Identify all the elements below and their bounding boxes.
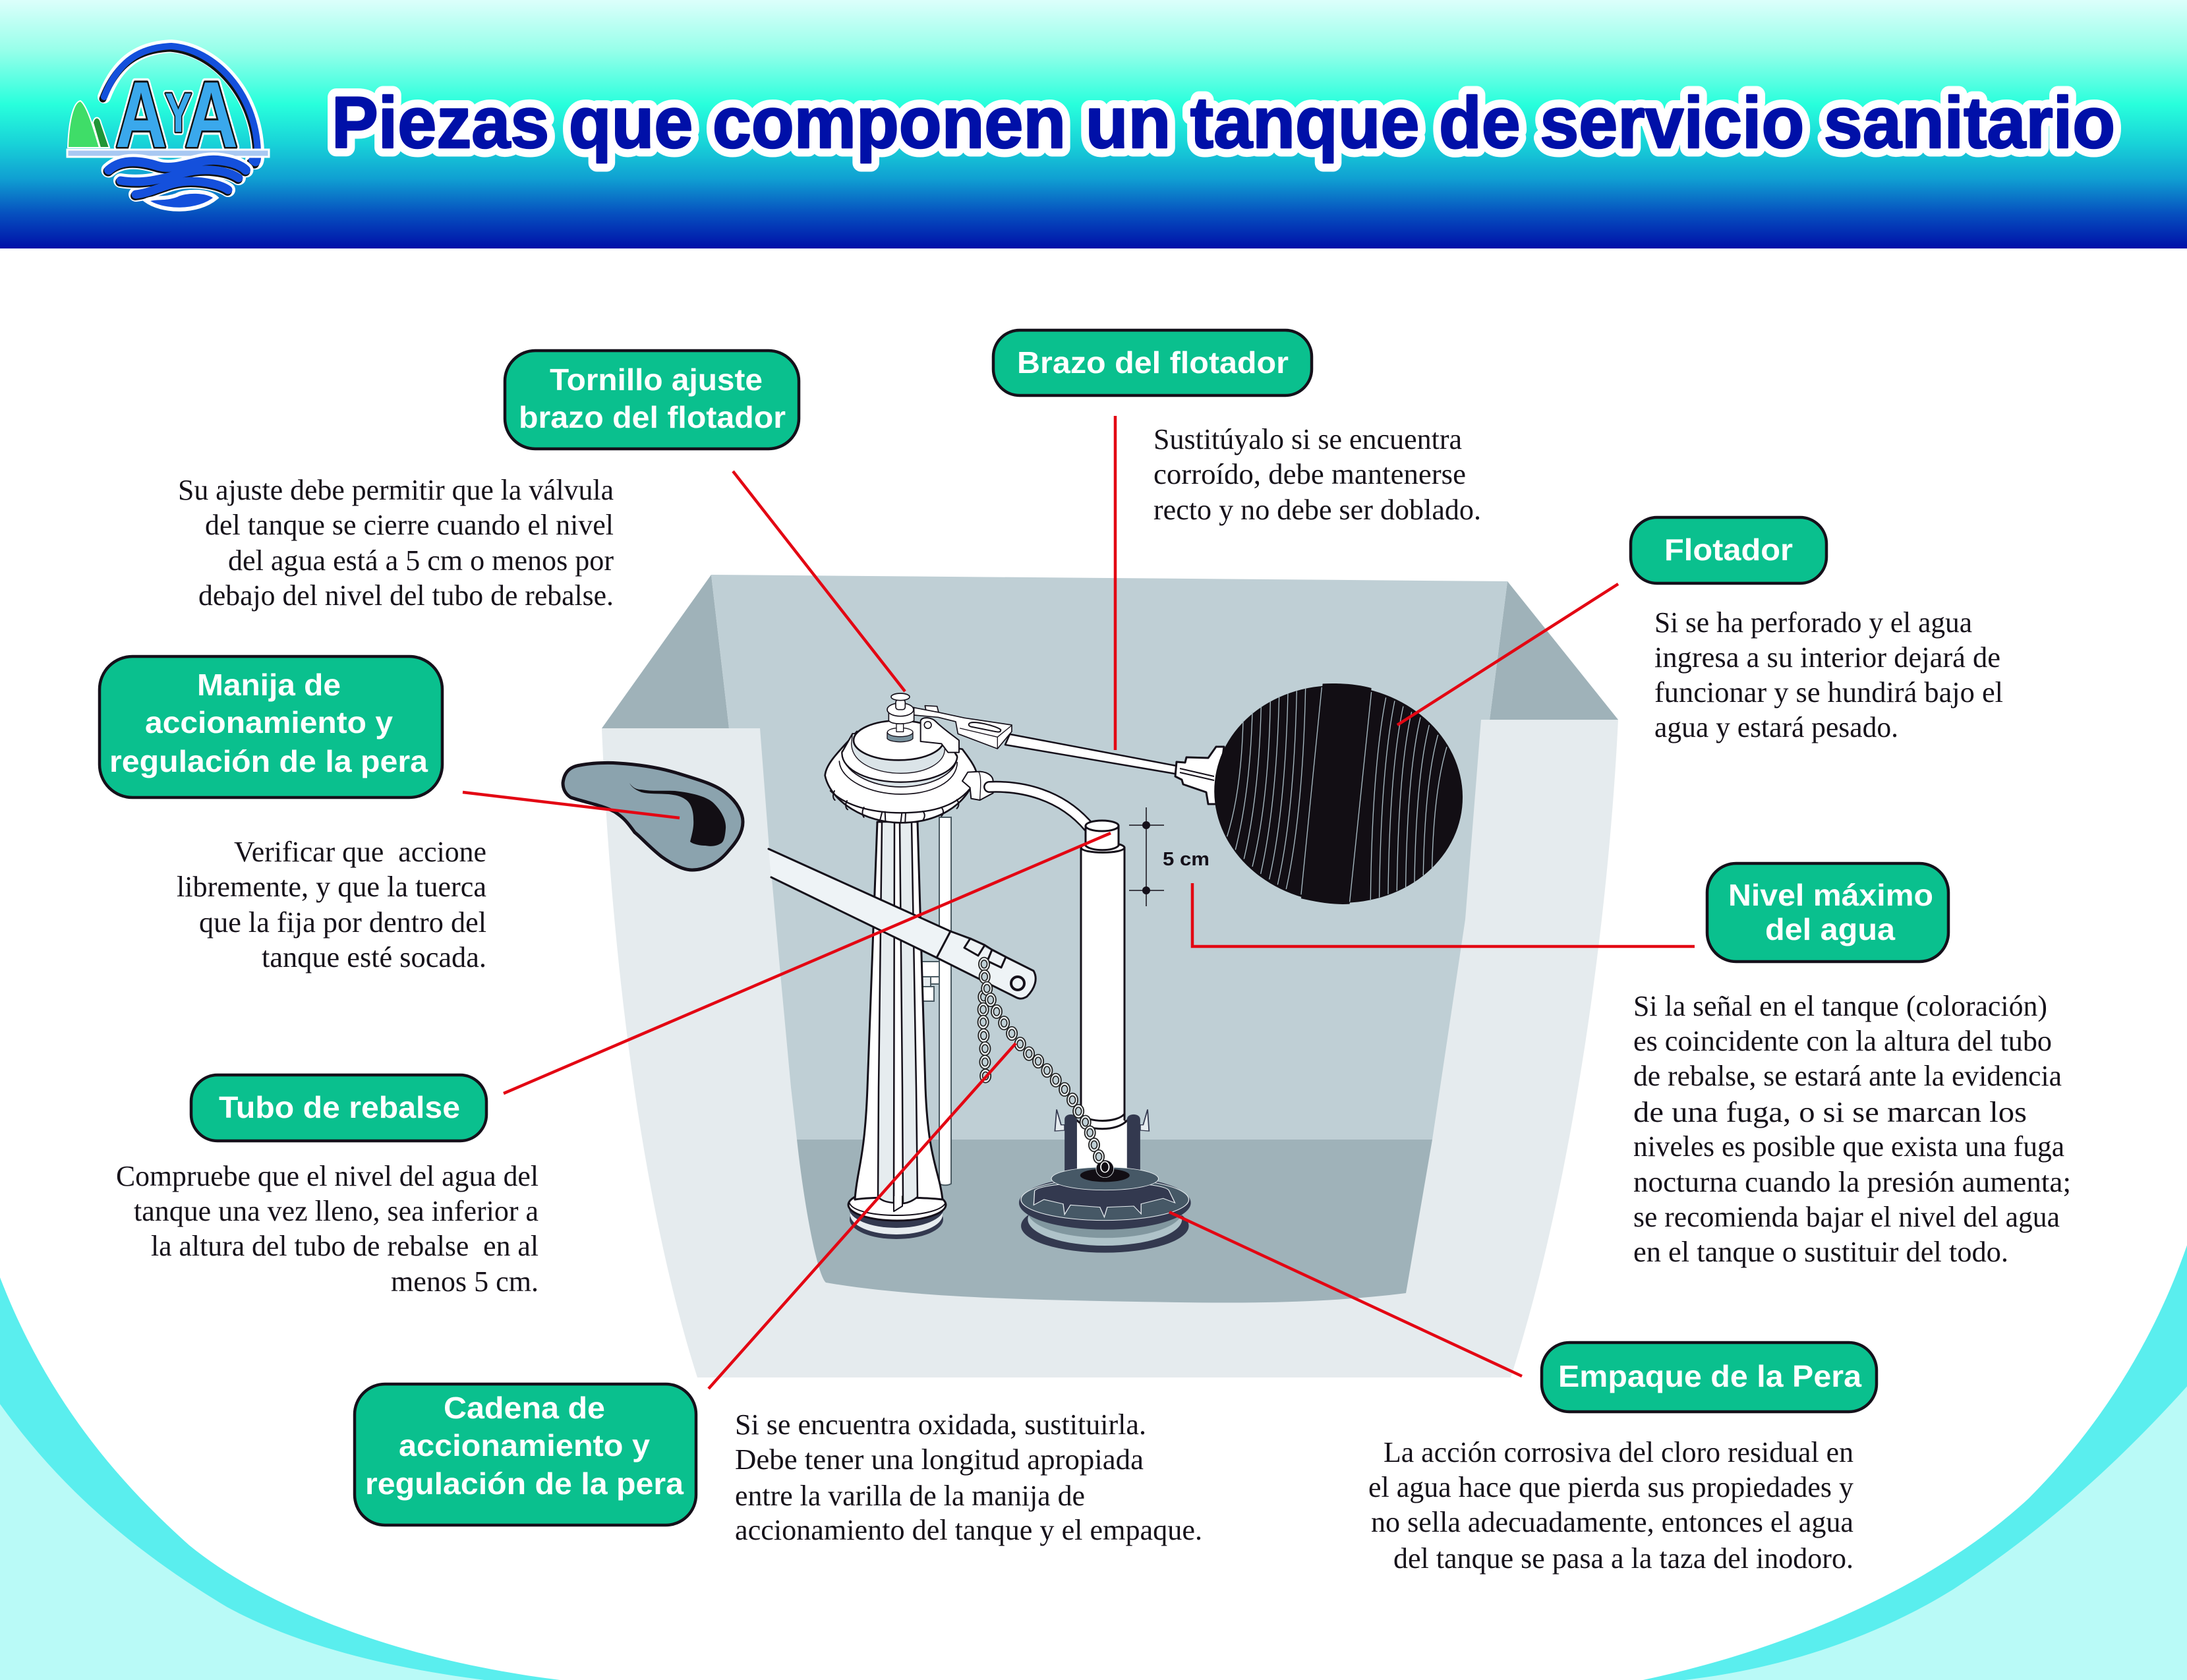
text: nivel: nocturna cuando la presión aumenta; — [1633, 1166, 2071, 1198]
arm — [913, 707, 1012, 749]
panel: brazo del flotador — [993, 330, 1481, 526]
panel: empaque de la pera — [1368, 1343, 1877, 1575]
flapper assembly — [1019, 1109, 1191, 1253]
text: empaque: no sella adecuadamente, entonces el agua — [1371, 1506, 1853, 1538]
text: brazo: corroído, debe mantenerse — [1153, 458, 1466, 490]
pill: flotador: Flotador — [1664, 533, 1793, 567]
pill: manija — [100, 656, 442, 797]
pill: tubo: Tubo de rebalse — [219, 1090, 460, 1124]
refill hose — [989, 787, 1089, 827]
text: cadena: Si se encuentra oxidada, sustituirla. — [735, 1408, 1146, 1441]
panel: nivel maximo del agua — [1633, 863, 2071, 1268]
leader: cadena — [709, 1043, 1016, 1389]
fill valve foot — [848, 1188, 946, 1239]
valve dome — [854, 720, 944, 760]
fill valve head — [825, 693, 1012, 823]
panel: tubo de rebalse — [116, 1075, 539, 1298]
text: nivel: niveles es posible que exista una fuga — [1633, 1130, 2064, 1163]
float connector — [1175, 747, 1224, 804]
tank floor — [797, 1140, 1432, 1303]
text: nivel: en el tanque o sustituir del todo. — [1633, 1236, 2008, 1268]
text: cadena — [735, 1408, 1202, 1546]
pill: empaque: Empaque de la Pera — [1558, 1359, 1861, 1393]
text: nivel: de rebalse, se estará ante la evidencia — [1633, 1060, 2062, 1092]
text: manija: tanque esté socada. — [262, 941, 486, 973]
text: tornillo: del agua está a 5 cm o menos por — [228, 544, 614, 577]
text: tubo: Compruebe que el nivel del agua del — [116, 1160, 539, 1192]
pill: tornillo — [505, 351, 799, 449]
logo letters: A — [115, 63, 167, 167]
logo letters: A — [185, 63, 238, 167]
panel: cadena — [355, 1384, 1202, 1546]
leader lines — [463, 416, 1695, 1389]
text: tubo — [116, 1160, 539, 1298]
text: flotador — [1654, 606, 2003, 743]
panel: tornillo ajuste — [178, 351, 799, 612]
leader: empaque — [1169, 1212, 1522, 1376]
text: manija: libremente, y que la tuerca — [177, 871, 486, 903]
pill: nivel: Nivel máximo — [1728, 878, 1933, 912]
text: nivel: Si la señal en el tanque (coloración) — [1633, 990, 2047, 1022]
text: tubo: menos 5 cm. — [391, 1265, 539, 1298]
text: empaque: del tanque se pasa a la taza del inodoro. — [1393, 1542, 1853, 1575]
float ball — [1204, 674, 1473, 915]
logo letters: Y — [165, 82, 192, 144]
text: tubo: tanque una vez lleno, sea inferior a — [134, 1195, 539, 1227]
text: nivel: de una fuga, o si se marcan los — [1633, 1096, 2027, 1128]
logo mountains — [68, 101, 109, 148]
text: empaque: La acción corrosiva del cloro residual en — [1384, 1436, 1853, 1468]
logo letters: A — [115, 63, 167, 167]
leader: tubo — [504, 833, 1111, 1093]
text: cadena: Debe tener una longitud apropiada — [735, 1443, 1144, 1476]
decorative wave: bottom left corner — [0, 1277, 560, 1680]
text: manija: Verificar que accione — [234, 836, 486, 868]
title: Piezas que componen un tanque de servicio sanitario — [332, 82, 2115, 163]
chain — [978, 958, 1104, 1163]
text: manija: que la fija por dentro del — [199, 906, 486, 939]
text: empaque: el agua hace que pierda sus propiedades y — [1368, 1471, 1853, 1503]
logo horizon bar — [67, 150, 269, 157]
logo letters: A — [185, 63, 238, 167]
text: tornillo — [178, 474, 614, 612]
pill: flotador — [1631, 517, 1826, 583]
pill: cadena: accionamiento y — [399, 1428, 650, 1463]
text: cadena: accionamiento del tanque y el empaque. — [735, 1514, 1202, 1546]
logo letters: Y — [165, 82, 192, 144]
pill: cadena: regulación de la pera — [365, 1466, 684, 1501]
logo letters — [115, 63, 238, 167]
flapper hole — [1080, 1169, 1130, 1182]
flapper dome with teeth — [1034, 1182, 1175, 1217]
flapper clips — [1055, 1109, 1149, 1131]
float rod — [1005, 734, 1177, 774]
valve base disc — [825, 732, 977, 823]
pill: tornillo: brazo del flotador — [519, 400, 786, 434]
flapper chain ball — [1096, 1160, 1114, 1178]
tank front faces — [602, 720, 1618, 1377]
flapper posts — [1064, 1115, 1140, 1175]
panel: flotador — [1631, 517, 2003, 743]
logo arc — [103, 46, 258, 165]
logo waves — [108, 160, 246, 196]
pill: nivel: del agua — [1765, 912, 1895, 946]
text: tubo: la altura del tubo de rebalse en al — [151, 1230, 539, 1262]
pill: brazo — [993, 330, 1312, 395]
title: Piezas que componen un tanque de servicio sanitario — [332, 82, 2115, 163]
text: brazo: Sustitúyalo si se encuentra — [1153, 423, 1462, 455]
screw collar — [889, 707, 914, 724]
pill: cadena — [355, 1384, 696, 1525]
valve rings — [839, 761, 957, 794]
back tab — [925, 706, 939, 712]
text: flotador: funcionar y se hundirá bajo el — [1654, 676, 2003, 709]
text: flotador: agua y estará pesado. — [1654, 711, 1898, 743]
pill: manija: regulación de la pera — [109, 744, 428, 778]
panel: manija — [100, 656, 486, 973]
pill: cadena: Cadena de — [444, 1391, 605, 1425]
fill valve column — [855, 822, 943, 1211]
flapper top disc — [1021, 1178, 1189, 1221]
pill: empaque — [1542, 1343, 1877, 1412]
text: nivel — [1633, 990, 2071, 1268]
5 cm dimension mark: 5 cm — [1163, 849, 1210, 870]
text: tornillo: debajo del nivel del tubo de rebalse. — [198, 579, 614, 612]
pill: tubo — [191, 1075, 486, 1141]
thin refill tube — [939, 817, 951, 1185]
tank illustration — [563, 575, 1618, 1377]
handle — [563, 763, 743, 870]
pill: manija: accionamiento y — [145, 705, 393, 739]
logo fish — [146, 192, 216, 210]
text: empaque — [1368, 1436, 1853, 1575]
text: tornillo: del tanque se cierre cuando el nivel — [205, 509, 614, 541]
adjusting nub — [887, 732, 913, 742]
text: nivel: es coincidente con la altura del tubo — [1633, 1025, 2052, 1057]
tank side wall right — [1490, 581, 1618, 720]
text: tornillo: Su ajuste debe permitir que la válvula — [178, 474, 614, 506]
pill: manija: Manija de — [197, 668, 341, 702]
leader: brazo — [1114, 416, 1117, 750]
text: flotador: ingresa a su interior dejará de — [1654, 641, 2000, 674]
leader: tornillo — [733, 471, 905, 691]
text: brazo — [1153, 423, 1481, 526]
leader: manija — [463, 792, 680, 818]
text: brazo: recto y no debe ser doblado. — [1153, 494, 1481, 526]
text: flotador: Si se ha perforado y el agua — [1654, 606, 1972, 639]
tank back wall — [711, 575, 1507, 1140]
latch — [921, 718, 959, 753]
pill: nivel — [1707, 863, 1948, 962]
logo: AyA — [67, 46, 269, 210]
overflow tube — [1077, 821, 1127, 1173]
text: nivel: se recomienda bajar el nivel del agua — [1633, 1201, 2060, 1233]
header band — [0, 0, 2187, 248]
leader: flotador — [1397, 584, 1618, 725]
pill: brazo: Brazo del flotador — [1017, 345, 1289, 380]
flapper cap — [1051, 1167, 1159, 1190]
hose connector — [962, 772, 993, 800]
small bracket — [921, 962, 939, 1001]
pill: tornillo: Tornillo ajuste — [550, 362, 763, 397]
decorative wave: bottom right corner — [1643, 1245, 2187, 1680]
text: manija — [177, 836, 486, 973]
5 cm dimension mark — [1129, 807, 1210, 906]
flapper lower rings — [1021, 1199, 1189, 1253]
text: cadena: entre la varilla de la manija de — [735, 1480, 1085, 1512]
leader: nivel — [1192, 883, 1695, 946]
valve ridges — [833, 791, 958, 822]
tank side wall left — [602, 575, 729, 728]
flush lever arm — [769, 849, 1035, 999]
